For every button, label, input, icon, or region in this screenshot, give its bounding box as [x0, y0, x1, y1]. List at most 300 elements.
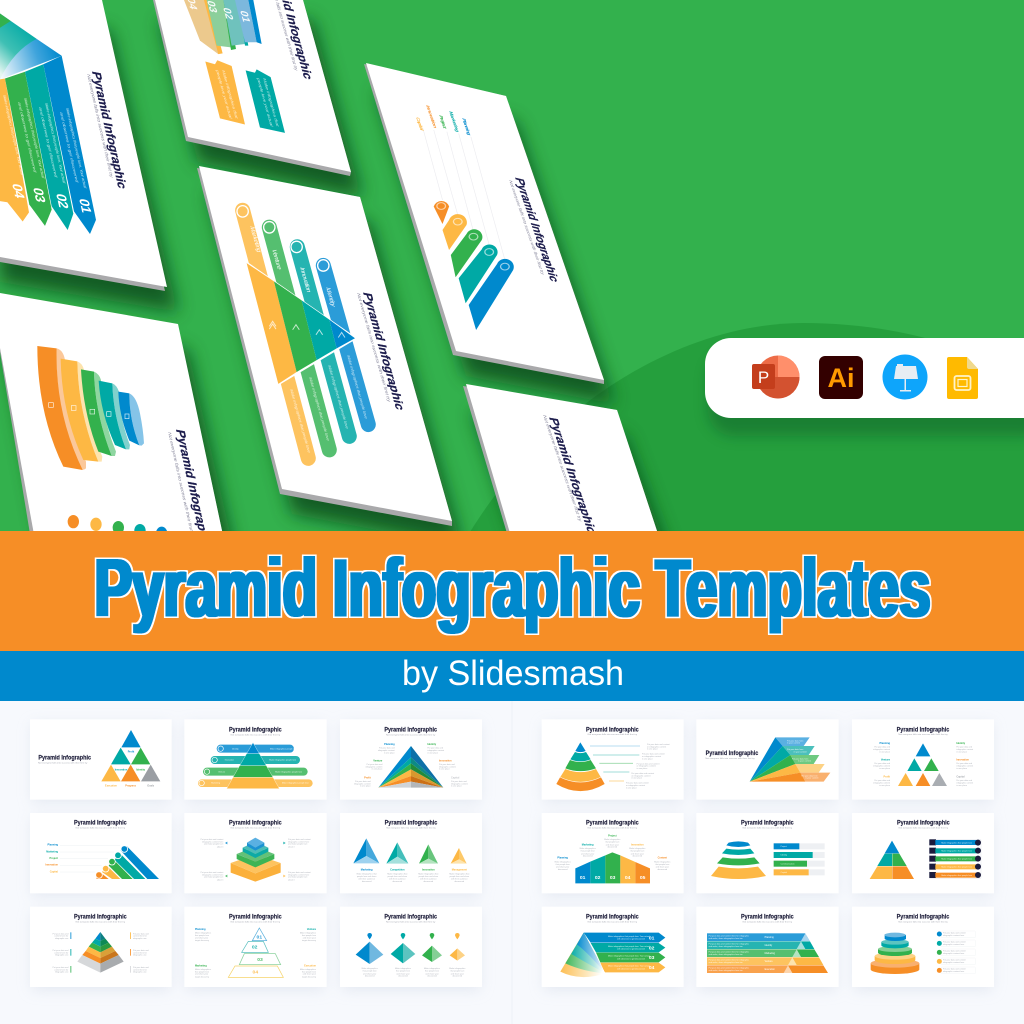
card: stacked cylinders with list: infographic content here	[943, 970, 965, 973]
card: fan with numbered arrows: 04	[649, 965, 655, 971]
card: 3D banded pyramid: Not everyone falls into success with their first try	[76, 920, 126, 923]
card: table rows with pyramid: Not everyone falls into success with their first try	[743, 920, 793, 923]
card: rounded cone pyramid: Pyramid Infographic	[586, 726, 639, 733]
card: four tetrahedra: Innovation	[422, 868, 435, 871]
card: fan with numbered arrows: Make infographics that people love. Your actual	[608, 935, 650, 938]
slide: top left with four arrow ribbons: Pyramid Infographic	[89, 70, 129, 190]
slide: top left with four arrow ribbons	[0, 0, 167, 291]
card: separated triangle mosaic: in one place	[879, 768, 891, 770]
card: outlined numbered pyramid: target discovery	[195, 975, 209, 978]
card: fanned pyramid with labels: Put your data and	[427, 747, 443, 750]
card: rounded cone pyramid: in one place	[637, 768, 648, 770]
card: stacked cylinders with list: Put your data and content	[943, 959, 966, 962]
card: table rows with pyramid: Pyramid Infographic	[741, 914, 794, 921]
slide: top left with four arrow ribbons: and observes to get discovered	[38, 107, 59, 178]
card: 3D banded pyramid	[30, 907, 172, 987]
card: fanned pyramid with labels: in one place	[360, 786, 372, 788]
card: outlined numbered pyramid: target discovery	[195, 939, 209, 942]
card: separated triangle mosaic: infographic content	[956, 781, 974, 784]
card: split triangle with dark bars: Make infographics that people love	[941, 866, 973, 869]
card: stepped isometric pyramid: and make people love	[288, 877, 308, 879]
card: four diamonds with pins: discovered	[453, 975, 462, 978]
card: outlined numbered pyramid: Execution	[304, 964, 316, 967]
slide: upper right with staircase pyramid: Planning	[460, 118, 472, 136]
card: house shaped bars: and share your	[606, 843, 619, 846]
card: stepped isometric pyramid: Put your data and content	[201, 871, 224, 874]
card: fan pyramid with pale ribbons: Not everyone falls into success with their first try	[705, 757, 756, 760]
card: table rows with pyramid: Identity	[765, 944, 773, 947]
card: four diamonds with pins: that people love	[425, 970, 440, 973]
card: four tetrahedra: people love and share	[388, 875, 408, 878]
card: table rows with pyramid: Venture	[765, 960, 773, 963]
slide: centre with capsules and triangle: Marketing	[248, 226, 262, 253]
card: split triangle with dark bars: Make infographics that people love	[941, 850, 973, 853]
card: fanned pyramid with labels: in one place	[451, 786, 463, 788]
card: stepped isometric pyramid: infographic content here	[202, 873, 224, 876]
card: house shaped bars: that people love	[605, 841, 620, 844]
card: outlined numbered pyramid: Venture	[307, 928, 317, 931]
card: rounded cone pyramid: Put your data and content	[631, 772, 655, 775]
card: staircase ribbons: Capital	[50, 870, 58, 873]
card: fan pyramid with pale ribbons: in your content	[798, 760, 811, 763]
card: four diamonds with pins: discovered	[365, 975, 374, 978]
card: four tetrahedra: Make infographics that	[357, 872, 377, 875]
card: triangle mosaic: Not everyone falls into success with their first try	[38, 762, 88, 765]
card: house shaped bars: Make infographics	[580, 847, 596, 850]
card: separated triangle mosaic: Put your data and	[956, 779, 972, 782]
card: four tetrahedra: Management	[452, 868, 467, 871]
card: stepped isometric pyramid: infographic content here	[288, 873, 310, 876]
icon: PowerPoint: P	[758, 368, 769, 387]
slide: centre with capsules and triangle: Identity	[324, 287, 337, 308]
card: fanned pyramid with labels: Put your data and	[379, 747, 395, 750]
card: rounded cone pyramid: or infographic content	[647, 745, 667, 748]
card: fan with numbered arrows: with observes to get discovered	[617, 967, 645, 970]
card: house shaped bars: that people love	[655, 863, 670, 866]
card: rounded cone pyramid: Put your data and content	[637, 762, 660, 765]
card: four diamonds with pins: and share your	[396, 972, 410, 975]
card: four tetrahedra: Make infographics that	[418, 872, 439, 875]
panel: orange title band	[0, 531, 1024, 651]
card: split triangle with dark bars: Make infographics that people love	[941, 841, 973, 844]
card: outlined numbered pyramid: and share your	[195, 973, 209, 976]
card: house shaped bars: discovered	[658, 868, 667, 871]
card: four diamonds with pins: discovered	[398, 975, 408, 978]
card: table rows with pyramid: Put your data and content here for infographic	[709, 942, 749, 945]
card: house shaped bars: that people love	[630, 850, 645, 853]
card: fan pyramid with pale ribbons: in your content	[787, 742, 800, 745]
card: stacked discs with progress bars: Project	[781, 845, 787, 848]
card: 3D banded pyramid: Put your data and	[133, 966, 149, 969]
card: triangle mosaic: Goals	[147, 785, 155, 788]
card: outlined numbered pyramid: that people love	[302, 934, 317, 937]
card: house shaped bars: that people love	[581, 850, 596, 853]
card: outlined numbered pyramid: Make infographics	[300, 968, 316, 971]
card: stacked cylinders with list: Put your data and content	[943, 968, 966, 971]
card: fanned pyramid with labels: infographic content	[451, 782, 468, 785]
card: house shaped bars: that people love	[556, 863, 571, 866]
card: fan pyramid with pale ribbons: in your content	[794, 750, 807, 753]
card: fanned pyramid with labels: infographic content	[439, 765, 456, 768]
card: outlined numbered pyramid: that people love	[302, 970, 317, 973]
card: four tetrahedra: discovered	[424, 880, 433, 883]
card: four diamonds with pins: Make infographics	[395, 967, 411, 970]
card: 3D banded pyramid: infographic use	[55, 937, 69, 940]
card: separated triangle mosaic: Put your data and	[874, 762, 890, 765]
card: house shaped bars: Content	[658, 857, 667, 860]
card: 3D banded pyramid: content here for	[54, 951, 69, 954]
card: table rows with pyramid: Put your data and content here for infographic	[709, 934, 749, 937]
card: separated triangle mosaic: infographic content	[873, 781, 890, 784]
card: rounded cone pyramid: Not everyone falls into success with their first try	[588, 733, 638, 736]
card: fan with numbered arrows: with observes to get discovered	[617, 957, 645, 960]
card: four diamonds with pins: that people love	[450, 970, 465, 973]
card: rounded cone pyramid: in one place	[626, 787, 638, 789]
card: outlined numbered pyramid: 03	[257, 957, 263, 963]
card: fan with numbered arrows: Pyramid Infographic	[586, 914, 639, 921]
card: stacked cylinders with list: infographic content here	[943, 943, 965, 946]
card: four tetrahedra: Make infographics that	[387, 872, 408, 875]
slide: upper right with staircase pyramid: Capital	[414, 117, 425, 132]
card: stacked cylinders with list: Put your data and content	[943, 941, 966, 944]
card: 3D banded pyramid: content here for	[54, 968, 69, 971]
card: separated triangle mosaic: in one place	[879, 752, 891, 754]
card: pyramid over capsules: Make infographics people love	[282, 782, 310, 785]
card: separated triangle mosaic: Put your data and	[874, 746, 890, 749]
card: fanned pyramid with labels: in one place	[439, 769, 451, 771]
card: staircase ribbons	[30, 813, 172, 893]
card: house shaped bars: discovered	[633, 855, 642, 858]
card: four diamonds with pins	[340, 907, 482, 987]
card: four tetrahedra: people love and share	[419, 875, 439, 878]
card: rounded cone pyramid: or infographic content	[626, 784, 646, 787]
panel: right thumbnail grid	[542, 719, 994, 987]
card: stepped isometric pyramid: Pyramid Infographic	[229, 820, 282, 827]
card: 3D banded pyramid: infographic use	[55, 971, 69, 974]
panel: thumbnail area background	[0, 701, 1024, 1024]
slide: top middle with stacked ribbons and two cards: Make infographics that	[221, 70, 240, 120]
slide: centre with capsules and triangle: Not everyone falls into success with their first try	[356, 293, 392, 403]
card: stacked cylinders with list: Put your data and content	[943, 950, 966, 953]
card: pyramid over capsules: Make infographics people love	[270, 747, 298, 750]
slide: centre with capsules and triangle: Make infographics that people love	[289, 389, 312, 454]
card: stepped isometric pyramid: and make people love	[288, 844, 308, 846]
card: fan with numbered arrows: 03	[649, 955, 655, 961]
card: four diamonds with pins: Make infographics	[362, 967, 378, 970]
card: outlined numbered pyramid: Pyramid Infographic	[229, 914, 282, 921]
panel: perspective slide mockups	[0, 0, 668, 550]
card: fanned pyramid with labels: infographic content	[378, 749, 395, 752]
slide: upper right with staircase pyramid	[364, 63, 604, 384]
card: staircase ribbons: Planning	[47, 844, 58, 847]
card: house shaped bars: Make infographics	[555, 860, 571, 863]
card: separated triangle mosaic: Profit	[883, 775, 890, 778]
card: 3D banded pyramid: Pyramid Infographic	[74, 914, 127, 921]
slide: top left with four arrow ribbons: Make infographics that people love. Your actual	[2, 95, 25, 176]
card: pyramid over capsules: Marketing	[211, 782, 220, 785]
card: 3D banded pyramid: Put your data and	[53, 966, 68, 969]
card: table rows with pyramid: Execution	[765, 968, 776, 971]
slide: centre with capsules and triangle	[197, 166, 452, 526]
card: separated triangle mosaic	[852, 719, 994, 800]
card: 3D banded pyramid: Put your data and	[133, 949, 149, 952]
card: 3D banded pyramid: infographic use	[133, 937, 147, 940]
card: outlined numbered pyramid: that people love	[195, 970, 210, 973]
card: four diamonds with pins: Not everyone falls into success with their first try	[386, 920, 436, 923]
card: pyramid over capsules: Make infographics people love	[269, 759, 297, 762]
card: four tetrahedra	[340, 813, 482, 893]
card: stacked cylinders with list: infographic content here	[943, 952, 965, 955]
card: four tetrahedra: with their audience	[451, 878, 468, 881]
slide: top left with four arrow ribbons: Make infographics that people love. Your actual	[44, 103, 67, 184]
card: fan pyramid with pale ribbons: Put your data here	[787, 739, 804, 742]
card: split triangle with dark bars	[852, 813, 994, 893]
card: rounded cone pyramid: Put your data and content	[642, 753, 665, 756]
card: four tetrahedra: Competition	[390, 868, 405, 871]
card: table rows with pyramid: Planning	[765, 937, 774, 939]
icon: Illustrator: Ai	[828, 363, 854, 393]
card: outlined numbered pyramid: Not everyone falls into success with their first try	[231, 920, 281, 923]
card: stepped isometric pyramid: about it	[288, 845, 295, 848]
card: table rows with pyramid: Put your data and content here for infographic	[709, 958, 749, 961]
card: outlined numbered pyramid: 02	[252, 945, 258, 951]
card: staircase ribbons: Pyramid Infographic	[74, 820, 127, 827]
card: 3D banded pyramid: content here for	[133, 968, 147, 971]
card: four diamonds with pins: Make infographics	[424, 967, 440, 970]
slide: top middle with stacked ribbons and two cards: people love your actual	[256, 78, 274, 127]
slide: centre with capsules and triangle: Make infographics that people love	[346, 355, 369, 420]
card: staircase ribbons: Not everyone falls into success with their first try	[76, 827, 126, 830]
card: separated triangle mosaic: in one place	[956, 752, 968, 754]
panel: green hero background	[0, 0, 1024, 532]
slide: top middle with stacked ribbons and two cards	[153, 0, 351, 176]
card: split triangle with dark bars: Not everyone falls into success with their first try	[899, 827, 949, 830]
card: outlined numbered pyramid: target discovery	[302, 975, 316, 978]
card: table rows with pyramid: Put your data and content here for infographic	[709, 950, 749, 953]
card: four tetrahedra: with their audience	[389, 878, 406, 881]
card: four diamonds with pins: and share your	[425, 972, 439, 975]
card: rounded cone pyramid: Put your data and content	[626, 782, 649, 785]
panel: blue subtitle band	[0, 651, 1024, 701]
card: rounded cone pyramid: or infographic content	[642, 755, 662, 758]
card: fanned pyramid with labels: Put your data and	[367, 763, 382, 766]
card: four tetrahedra: discovered	[362, 880, 371, 883]
card: fanned pyramid with labels: Planning	[384, 743, 395, 746]
card: pyramid over capsules	[184, 719, 327, 800]
slide: upper right with staircase pyramid: Project	[437, 115, 448, 129]
card: stacked cylinders with list	[852, 907, 994, 987]
card: fan with numbered arrows: with observes to get discovered	[617, 948, 645, 951]
card: fan with numbered arrows: 01	[649, 935, 655, 941]
card: outlined numbered pyramid: Marketing	[195, 964, 207, 967]
card: house shaped bars: Planning	[557, 857, 568, 860]
card: house shaped bars: Not everyone falls into success with their first try	[588, 827, 638, 830]
slide: top left with four arrow ribbons: 03	[30, 186, 49, 204]
card: pyramid over capsules: Identity	[232, 747, 239, 750]
card: house shaped bars: and share your	[656, 866, 669, 869]
card: separated triangle mosaic: infographic content	[873, 748, 890, 751]
slide: top left with four arrow ribbons: Not everyone falls into success with their first try	[86, 74, 114, 179]
card: four tetrahedra: discovered	[393, 880, 402, 883]
card: house shaped bars: 04	[625, 875, 631, 881]
card: fanned pyramid with labels: infographic content	[366, 765, 383, 768]
card: separated triangle mosaic: infographic content	[956, 748, 974, 751]
card: house shaped bars: and share your	[631, 852, 644, 855]
card: stepped isometric pyramid: infographic content here	[288, 840, 310, 843]
card: stepped isometric pyramid: and make people love	[204, 844, 224, 846]
card: stepped isometric pyramid: Put your data and content	[201, 838, 224, 841]
card: stepped isometric pyramid: Not everyone falls into success with their first try	[231, 827, 281, 830]
card: 3D banded pyramid: Put your data and	[53, 949, 68, 952]
card: fan pyramid with pale ribbons: Pyramid Infographic	[706, 750, 759, 757]
card: rounded cone pyramid: Put your data and content	[647, 743, 670, 746]
card: separated triangle mosaic: Venture	[881, 758, 891, 761]
card: separated triangle mosaic: infographic content	[873, 764, 890, 767]
card: house shaped bars: discovered	[608, 846, 617, 849]
card: stacked cylinders with list: infographic content here	[943, 961, 965, 964]
card: table rows with pyramid: and make, share infographics here too	[709, 937, 743, 940]
card: separated triangle mosaic: Pyramid Infographic	[897, 726, 950, 733]
card: outlined numbered pyramid: and share your	[303, 973, 316, 976]
card: outlined numbered pyramid: that people love	[195, 934, 210, 937]
card: triangle mosaic	[30, 719, 172, 800]
card: split triangle with dark bars: Pyramid Infographic	[897, 820, 950, 827]
slide: lower right title only: Not everyone falls into success with their first try	[542, 415, 583, 522]
card: house shaped bars: Make infographics	[604, 838, 620, 841]
card: outlined numbered pyramid: and share your	[303, 936, 316, 939]
card: pyramid over capsules: Venture	[218, 770, 226, 773]
card: fanned pyramid with labels: Innovation	[439, 759, 452, 762]
card: stacked discs with progress bars: Pyramid Infographic	[741, 820, 794, 827]
card: house shaped bars: discovered	[558, 868, 567, 871]
slide: lower right title only	[463, 384, 660, 540]
card: fanned pyramid with labels: Pyramid Infographic	[384, 726, 437, 733]
card: house shaped bars: 02	[595, 875, 601, 881]
card: fan with numbered arrows: Make infographics that people love. Your actual	[608, 965, 650, 968]
card: 3D banded pyramid: Put your data and	[133, 932, 149, 935]
slide: upper right with staircase pyramid: Marketing	[447, 111, 460, 133]
card: stepped isometric pyramid: Put your data and content	[288, 838, 311, 841]
card: fan with numbered arrows: Make infographics that people love. Your actual	[608, 945, 650, 948]
card: four tetrahedra: people love and share	[357, 875, 377, 878]
card: 3D banded pyramid: infographic use	[133, 971, 147, 974]
card: stacked discs with progress bars: Not everyone falls into success with their first try	[743, 827, 793, 830]
card: house shaped bars: 01	[580, 875, 586, 881]
card: stacked discs with progress bars: Capital	[781, 871, 787, 874]
card: 3D banded pyramid: infographic use	[133, 954, 147, 957]
icon: Keynote	[882, 354, 928, 400]
card: outlined numbered pyramid: Make infographics	[195, 968, 211, 971]
card: fan with numbered arrows: Make infographics that people love. Your actual	[608, 955, 650, 958]
card: triangle mosaic: Progress	[125, 785, 137, 788]
card: stepped isometric pyramid	[184, 813, 327, 893]
card: stepped isometric pyramid: Put your data and content	[288, 871, 311, 874]
card: triangle mosaic: Innovation	[115, 768, 128, 771]
card: stacked discs with progress bars: Identity	[781, 854, 787, 857]
card: separated triangle mosaic: Innovation	[956, 758, 969, 761]
card: stacked cylinders with list: infographic content here	[943, 934, 965, 937]
card: four diamonds with pins: and share your	[363, 972, 377, 975]
slide: upper right with staircase pyramid: Pyramid Infographic	[512, 176, 562, 283]
card: table rows with pyramid: and make, share infographics here too	[709, 953, 743, 956]
slide: lower left with stacked arcs: Not everyone falls into success with their first try	[167, 432, 196, 539]
card: outlined numbered pyramid: Make infographics	[195, 932, 211, 935]
card: stepped isometric pyramid: about it	[288, 878, 295, 881]
slide: top left with four arrow ribbons: 04	[9, 182, 28, 200]
card: fanned pyramid with labels	[340, 719, 482, 800]
card: table rows with pyramid	[696, 907, 839, 987]
card: separated triangle mosaic: Put your data and	[956, 762, 972, 765]
card: fanned pyramid with labels: in one place	[384, 752, 396, 754]
slide: centre with capsules and triangle: Venture	[270, 249, 283, 270]
card: separated triangle mosaic: in one place	[879, 785, 891, 787]
card: house shaped bars: Make infographics	[629, 847, 645, 850]
card: house shaped bars: Make infographics	[654, 860, 670, 863]
card: stacked cylinders with list: Not everyone falls into success with their first try	[898, 920, 949, 923]
card: 3D banded pyramid: content here for	[133, 935, 147, 938]
card: staircase ribbons: Innovation	[45, 864, 58, 867]
card: four tetrahedra: Marketing	[361, 868, 373, 871]
card: fanned pyramid with labels: Put your data and	[451, 780, 467, 783]
card: fan pyramid with pale ribbons: Put your data here	[787, 748, 804, 751]
slide: top left with four arrow ribbons: and observes to get discovered	[17, 102, 38, 173]
card: rounded cone pyramid: or infographic content	[637, 765, 656, 768]
card: outlined numbered pyramid: 04	[253, 969, 258, 975]
card: fan pyramid with pale ribbons: Put your data here	[792, 757, 809, 760]
card: table rows with pyramid: and make, share infographics here too	[709, 961, 743, 964]
card: separated triangle mosaic: Put your data and	[874, 779, 890, 782]
slide: top left with four arrow ribbons: Make infographics that people love. Your actual	[23, 98, 46, 179]
slide: top middle with stacked ribbons and two cards: Make infographics that	[262, 78, 281, 128]
icon: Google Slides	[947, 357, 978, 399]
card: house shaped bars: Project	[608, 834, 617, 837]
slide: centre with capsules and triangle: Make infographics that people love	[308, 377, 331, 442]
card: stepped isometric pyramid: and make people love	[204, 877, 224, 879]
card: house shaped bars: and share your	[581, 852, 595, 855]
slide: lower right title only: Pyramid Infographic	[546, 416, 599, 534]
card: separated triangle mosaic: Not everyone falls into success with their first try	[898, 733, 949, 736]
card: fanned pyramid with labels: Identity	[427, 743, 437, 746]
card: table rows with pyramid: and make, share infographics here too	[709, 945, 743, 948]
card: house shaped bars: discovered	[583, 855, 592, 858]
card: fanned pyramid with labels: in one place	[372, 769, 383, 771]
card: 3D banded pyramid: infographic use	[55, 954, 69, 957]
card: house shaped bars: 05	[640, 875, 646, 881]
card: table rows with pyramid: and make, share infographics here too	[709, 969, 743, 972]
card: outlined numbered pyramid: target discovery	[302, 939, 316, 942]
card: rounded cone pyramid: or infographic content	[631, 774, 651, 777]
card: outlined numbered pyramid: Make infographics	[300, 932, 316, 935]
card: split triangle with dark bars: Make infographics that people love	[941, 874, 973, 877]
card: four diamonds with pins: Make infographics	[449, 967, 465, 970]
card: triangle mosaic: Identity	[136, 768, 146, 771]
card: house shaped bars: and share your	[556, 866, 570, 869]
card: stacked cylinders with list: Pyramid Infographic	[897, 914, 950, 921]
card: four diamonds with pins: and share your	[451, 972, 464, 975]
card: separated triangle mosaic: Identity	[956, 742, 966, 745]
card: table rows with pyramid: Marketing	[765, 952, 776, 955]
card: stepped isometric pyramid: about it	[217, 845, 224, 848]
card: separated triangle mosaic: in one place	[956, 785, 968, 787]
card: table rows with pyramid: Put your data and content here for infographic	[709, 966, 749, 969]
card: 3D banded pyramid: content here for	[54, 935, 69, 938]
card: four tetrahedra: with their audience	[420, 878, 437, 881]
card: separated triangle mosaic: Planning	[879, 742, 890, 745]
card: triangle mosaic: Pyramid Infographic	[38, 755, 91, 762]
panel: software icon pill	[705, 338, 1024, 436]
card: outlined numbered pyramid: Planning	[195, 928, 206, 931]
card: triangle mosaic: Profit	[128, 750, 134, 753]
